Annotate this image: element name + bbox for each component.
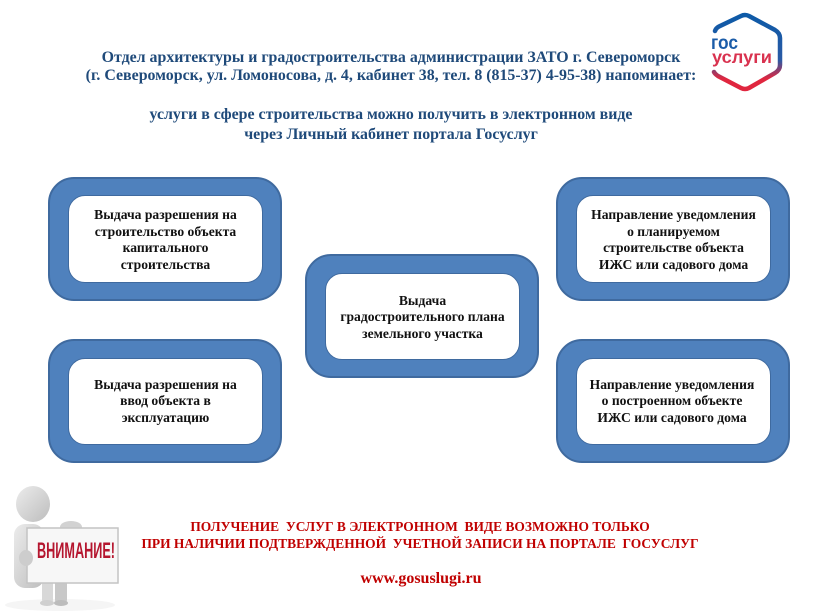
- text: completed construction notice: Направление уведомления: [590, 377, 754, 392]
- text: commissioning permit: [68, 358, 263, 445]
- text: completed construction notice: о построенном объекте: [602, 393, 742, 408]
- text: planned construction notice: о планируемом: [627, 224, 720, 238]
- header text: [86, 49, 696, 84]
- text: completed construction notice: [576, 358, 771, 445]
- text: urban plan: Выдача: [399, 293, 446, 308]
- icon: gosuslugi logo: [711, 12, 782, 92]
- panel: commissioning permit: [48, 339, 282, 463]
- text: planned construction notice: ИЖС или садового дома: [599, 256, 748, 272]
- text: planned construction notice: строительстве объекта: [603, 240, 744, 255]
- website link: www.gosuslugi.ru: [361, 570, 481, 587]
- text: construction permit: строительство объекта: [95, 224, 236, 238]
- text: construction permit: строительства: [121, 256, 210, 272]
- icon: gosuslugi logo: услуги: [712, 47, 772, 67]
- text: urban plan: [325, 273, 520, 360]
- text: construction permit: Выдача разрешения на: [94, 207, 237, 222]
- text: construction permit: [68, 195, 263, 283]
- warning text: ПОЛУЧЕНИЕ УСЛУГ В ЭЛЕКТРОННОМ ВИДЕ ВОЗМОЖНО ТОЛЬКО: [190, 519, 650, 534]
- header text: Отдел архитектуры и градостроительства администрации ЗАТО г. Североморск: [102, 49, 680, 66]
- text: construction permit: капитального: [123, 240, 208, 255]
- icon: gosuslugi logo: гос: [711, 33, 738, 54]
- text: completed construction notice: ИЖС или садового дома: [597, 410, 747, 425]
- subheading: через Личный кабинет портала Госуслуг: [244, 126, 538, 142]
- text: commissioning permit: Выдача разрешения на: [94, 377, 237, 392]
- header text: (г. Североморск, ул. Ломоносова, д. 4, кабинет 38, тел. 8 (815-37) 4-95-38) напоминает:: [86, 66, 696, 84]
- panel: planned construction notice: [556, 177, 790, 301]
- subheading: услуги в сфере строительства можно получить в электронном виде: [150, 106, 632, 123]
- text: planned construction notice: Направление уведомления: [591, 207, 756, 222]
- subheading: [150, 106, 632, 142]
- text: urban plan: земельного участка: [362, 326, 483, 341]
- text: planned construction notice: [576, 195, 771, 283]
- warning text: ПРИ НАЛИЧИИ ПОДТВЕРЖДЕННОЙ УЧЕТНОЙ ЗАПИСИ НА ПОРТАЛЕ ГОСУСЛУГ: [141, 536, 699, 551]
- warning text: [141, 519, 699, 551]
- text: commissioning permit: эксплуатацию: [122, 410, 209, 425]
- text: commissioning permit: ввод объекта в: [120, 393, 211, 408]
- icon: figure with attention sign: [6, 486, 119, 611]
- panel: construction permit: [48, 177, 282, 301]
- panel: completed construction notice: [556, 339, 790, 463]
- panel: urban plan: [305, 254, 539, 378]
- text: urban plan: градостроительного плана: [340, 309, 505, 324]
